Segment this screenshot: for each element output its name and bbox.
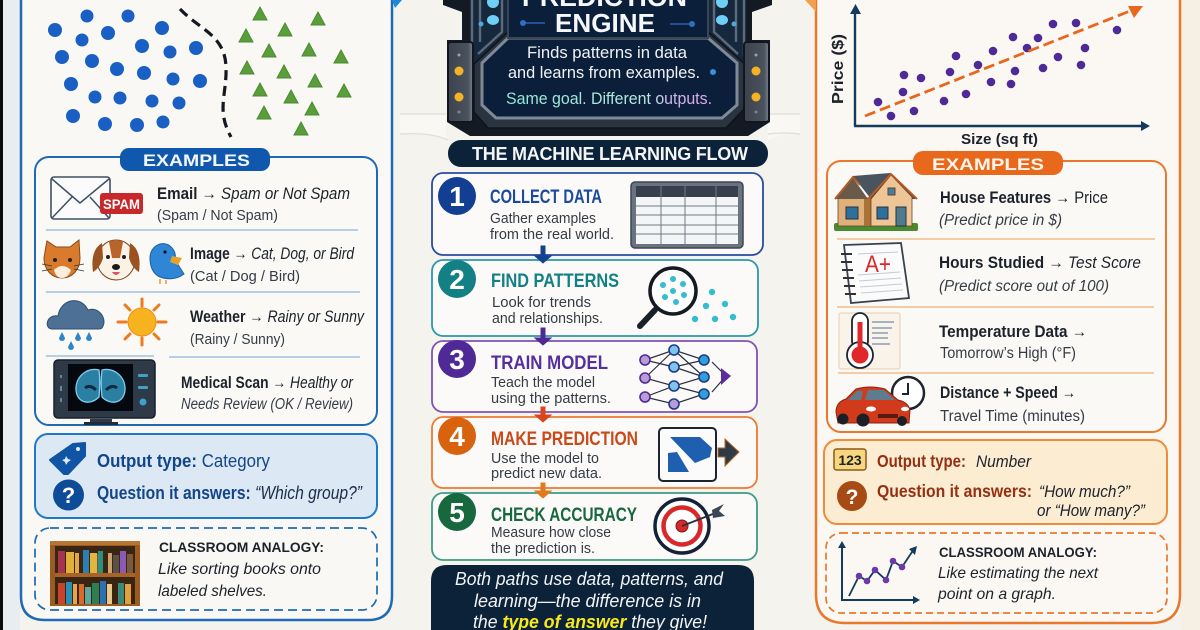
step text — [491, 429, 638, 482]
step text: MAKE PREDICTION — [491, 429, 638, 450]
icon: spam email — [51, 177, 143, 219]
icon: magnifier and dots — [640, 268, 736, 326]
y axis label: Price ($) — [830, 34, 847, 104]
classroom analogy box — [35, 528, 377, 610]
step text — [491, 271, 619, 327]
examples pill: EXAMPLES — [143, 151, 250, 170]
step text: Gather examples — [490, 211, 596, 227]
icon: question — [53, 480, 84, 510]
number badge — [438, 340, 476, 378]
takeaway banner: Both paths use data, patterns, and — [455, 569, 724, 589]
icon: dog — [92, 240, 140, 280]
icon: question: ? — [62, 483, 75, 508]
icon: thermometer — [839, 313, 900, 369]
text: output type: Number — [976, 452, 1032, 471]
x axis label: Size (sq ft) — [961, 131, 1038, 148]
icon: house — [834, 173, 918, 231]
side channels — [470, 0, 746, 62]
step 2: find patterns — [432, 260, 758, 336]
text: output type: Output type: Category — [97, 451, 270, 471]
number badge: 5 — [449, 497, 465, 528]
step text: FIND PATTERNS — [491, 271, 619, 292]
text: house example: (Predict price in $) — [939, 212, 1062, 229]
step text: the prediction is. — [491, 541, 595, 557]
number badge — [438, 417, 476, 455]
scatter: green triangles — [239, 7, 351, 135]
arrow 3 to 4 — [535, 407, 551, 422]
icon: tag — [50, 443, 85, 474]
text: house example: House Features → Price — [940, 188, 1108, 207]
text: distance example: Distance + Speed → — [940, 383, 1076, 402]
arrow 2 to 3 — [535, 328, 551, 345]
text: email example — [157, 184, 350, 224]
panel: regression — [805, 0, 1180, 623]
number badge — [438, 260, 476, 298]
text: output type: Output type: — [877, 451, 966, 471]
icon: sun — [118, 299, 166, 345]
side pods — [448, 42, 769, 122]
text: house example — [939, 188, 1108, 229]
icon: bookshelf — [50, 541, 140, 606]
text: weather example — [190, 307, 365, 348]
text: distance example: Travel Time (minutes) — [940, 408, 1085, 425]
trend line — [865, 6, 1143, 116]
icon: neural network — [640, 345, 731, 409]
text: medical scan example: Medical Scan → Healthy or — [181, 373, 354, 392]
text: distance example — [940, 383, 1085, 425]
examples pill — [120, 148, 270, 171]
step text: Teach the model — [491, 375, 595, 391]
text: weather example: (Rainy / Sunny) — [190, 331, 285, 348]
text: analogy: Like estimating the next — [938, 565, 1099, 582]
text: analogy: Like sorting books onto — [158, 561, 321, 578]
icon: spam email: SPAM — [103, 197, 140, 212]
text: medical scan example — [181, 373, 354, 413]
text: analogy: CLASSROOM ANALOGY: — [159, 539, 324, 555]
frame band — [474, 32, 745, 128]
title: ENGINE — [555, 8, 655, 38]
takeaway banner — [431, 565, 754, 630]
step text: predict new data. — [491, 466, 602, 482]
scatter chart — [830, 4, 1150, 148]
output type box — [824, 440, 1167, 524]
step 3: train model — [432, 340, 757, 412]
icon: bird — [150, 244, 184, 284]
text: question: or “How many?” — [1037, 502, 1146, 520]
text: email example: (Spam / Not Spam) — [157, 207, 278, 224]
icon: medical scan monitor — [54, 360, 155, 425]
flow heading — [448, 140, 768, 167]
text: image example: (Cat / Dog / Bird) — [190, 268, 300, 285]
examples pill — [913, 151, 1063, 175]
text: weather example: Weather → Rainy or Sunny — [190, 307, 365, 326]
text: image example: Image → Cat, Dog, or Bird — [190, 244, 354, 263]
panel: classification — [21, 0, 402, 620]
classroom analogy box — [826, 533, 1167, 613]
text: question: Question it answers: “Which group?” — [97, 483, 363, 503]
text: image example — [190, 244, 354, 285]
decision boundary — [180, 9, 231, 137]
step 1: collect data — [432, 173, 763, 255]
icon: question: ? — [846, 486, 858, 509]
machine body — [443, 0, 772, 136]
number badge — [438, 493, 476, 531]
text: analogy: CLASSROOM ANALOGY: — [939, 544, 1097, 560]
icon: notebook A+: A+ — [865, 251, 891, 278]
flow heading: THE MACHINE LEARNING FLOW — [472, 144, 748, 164]
number badge: 3 — [449, 344, 465, 375]
icon: line graph — [838, 541, 920, 604]
subtitle — [506, 43, 712, 108]
arrow 1 to 2 — [535, 246, 551, 263]
text: temperature example: Temperature Data → — [939, 322, 1087, 341]
examples box — [35, 148, 377, 425]
icon: 123: 123 — [838, 452, 862, 468]
scatter: blue dots — [48, 10, 207, 132]
text: temperature example — [939, 322, 1087, 362]
text: analogy: labeled shelves. — [158, 583, 267, 600]
icon: rain cloud — [47, 301, 104, 350]
icon: 123 — [834, 449, 866, 470]
step text — [490, 187, 614, 243]
step text: Measure how close — [491, 525, 611, 541]
text: temperature example: Tomorrow’s High (°F) — [940, 345, 1076, 362]
icon: target — [655, 499, 725, 553]
icon: question — [837, 481, 867, 511]
engine header — [443, 0, 772, 136]
number badge: 1 — [449, 181, 465, 212]
icon: notebook A+ — [841, 243, 909, 303]
takeaway banner: learning—the difference is in — [474, 591, 701, 611]
icon: data table — [631, 182, 743, 248]
text: analogy — [937, 544, 1099, 603]
text: question: Question it answers: — [877, 481, 1032, 501]
icon: car and clock — [836, 377, 924, 426]
text: medical scan example: Needs Review (OK / Review) — [181, 396, 353, 413]
subtitle: Finds patterns in data — [527, 43, 688, 62]
icon: cat — [42, 240, 84, 278]
step text — [491, 353, 611, 407]
step text: TRAIN MODEL — [491, 353, 608, 374]
step text: Use the model to — [491, 451, 599, 467]
upper title panel — [508, 0, 708, 38]
number badge: 4 — [449, 421, 465, 452]
step text: CHECK ACCURACY — [491, 505, 637, 526]
text: question: “How much?” — [1039, 483, 1131, 501]
step text: Look for trends — [492, 295, 591, 311]
text: output type — [877, 451, 1032, 471]
text: hours example: (Predict score out of 100) — [939, 278, 1109, 295]
examples box — [827, 151, 1166, 432]
title — [522, 0, 687, 38]
step text — [491, 505, 637, 557]
step text: and relationships. — [492, 311, 603, 327]
text: hours example — [939, 253, 1141, 295]
step 5: check accuracy — [432, 493, 757, 560]
text: email example: Email → Spam or Not Spam — [157, 184, 350, 203]
text: hours example: Hours Studied → Test Score — [939, 253, 1141, 272]
text: analogy — [158, 539, 324, 600]
text: analogy: point on a graph. — [937, 586, 1056, 603]
subtitle: and learns from examples. — [508, 63, 700, 82]
arrow 4 to 5 — [535, 483, 551, 498]
step text: COLLECT DATA — [490, 187, 602, 208]
data dots — [874, 19, 1121, 120]
icon: prediction output — [659, 428, 739, 481]
screen — [482, 38, 737, 118]
step text: using the patterns. — [491, 391, 611, 407]
examples pill: EXAMPLES — [932, 155, 1044, 174]
text: question — [877, 481, 1146, 520]
step text: from the real world. — [490, 227, 614, 243]
number badge: 2 — [449, 264, 465, 295]
output type box — [35, 434, 377, 518]
glow lights — [478, 0, 736, 75]
number badge — [438, 177, 476, 215]
subtitle: Same goal. Different outputs. — [506, 89, 712, 108]
step 4: make prediction — [432, 417, 757, 488]
